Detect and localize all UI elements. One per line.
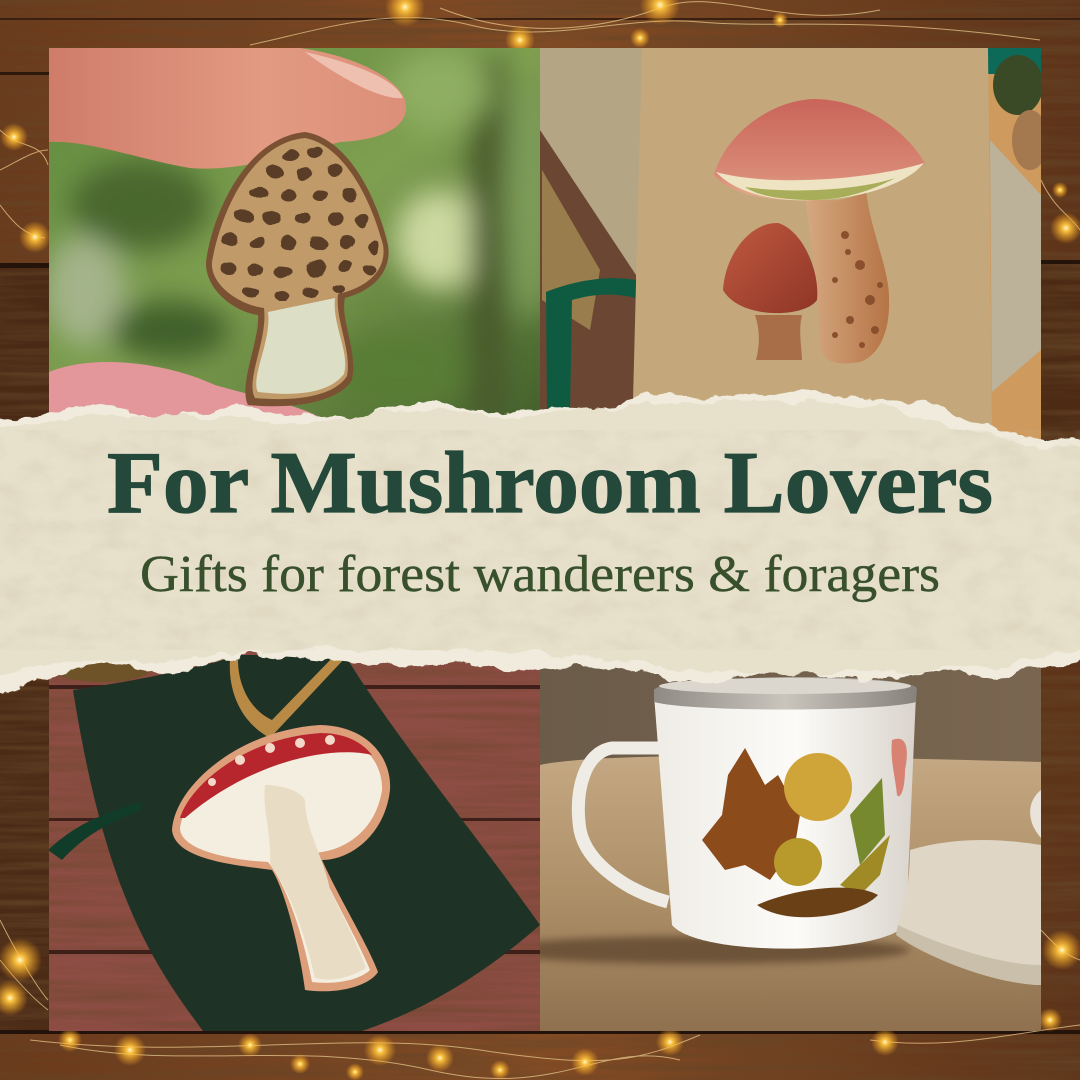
dark pouch: [73, 655, 540, 1031]
right side box: [988, 48, 1041, 448]
blurred foliage background: [45, 50, 556, 420]
lower finger: [49, 362, 325, 420]
upper finger: [49, 48, 406, 169]
box lid and envelope: [540, 48, 650, 280]
large mushroom cap: [714, 99, 925, 200]
gold ribbon: [230, 655, 345, 738]
mug handle: [578, 748, 668, 902]
folded cloth: [896, 840, 1041, 985]
mug rim: [654, 677, 917, 710]
amanita ornament: [172, 725, 390, 991]
photo: morel mushroom wooden pin held in fingers: [45, 48, 556, 428]
photo: enamel mug with autumn leaves: [540, 663, 1041, 1031]
photo: kraft card with watercolor mushrooms: [540, 48, 1048, 448]
torn paper banner: [0, 390, 1080, 696]
subtitle: Gifts for forest wanderers & foragers: [140, 546, 940, 603]
kraft card: [632, 48, 992, 440]
mug body: [654, 695, 916, 949]
mug leaf and mushroom print: [702, 748, 890, 917]
morel pin: [206, 132, 389, 406]
photo: amanita wooden decoration on black pouch: [48, 650, 540, 1031]
large mushroom stem: [805, 190, 889, 363]
title: For Mushroom Lovers: [107, 435, 993, 532]
small mushroom: [755, 315, 802, 360]
